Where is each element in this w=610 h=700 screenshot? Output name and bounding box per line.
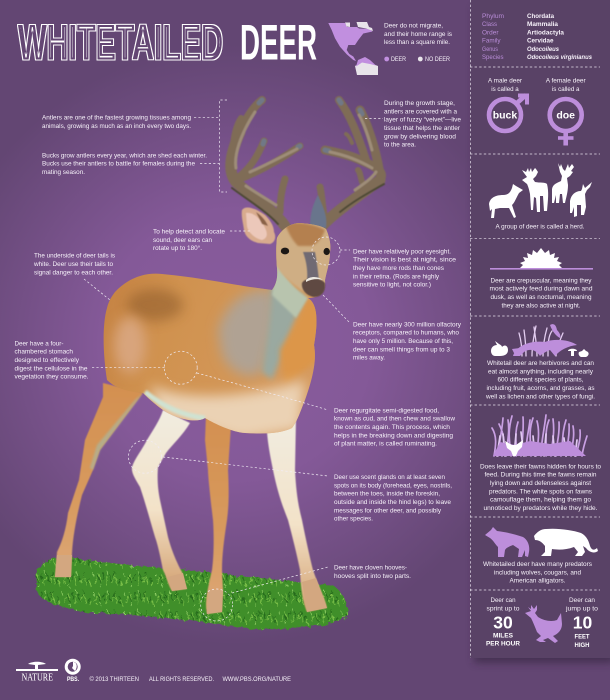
fawn text: unnoticed by predators while they hide. bbox=[484, 505, 598, 512]
eyes bbox=[281, 248, 289, 254]
jump caption: Deer can bbox=[569, 597, 595, 604]
map: greenland and arctic bbox=[345, 22, 373, 31]
buck caption bbox=[488, 78, 523, 93]
far leg shade bbox=[90, 393, 143, 470]
jump caption: jump up to bbox=[565, 605, 598, 612]
fruit bbox=[491, 341, 508, 356]
stat: jump height bbox=[565, 597, 598, 649]
callout: tail: The underside of deer tails is bbox=[34, 252, 116, 260]
callout: antler shedding: Bucks use their antlers to battle for females during the bbox=[42, 161, 195, 168]
activity text: dusk, as well as nocturnal, meaning bbox=[490, 294, 592, 301]
sprint caption: sprint up to bbox=[486, 605, 520, 612]
sprint unit bbox=[486, 632, 520, 648]
haunch highlight bbox=[114, 317, 146, 373]
callout: smell: have only 5 million. Because of this, bbox=[353, 338, 453, 345]
activity text: Deer are crepuscular, meaning they bbox=[490, 277, 592, 284]
diet text: 600 different species of plants, bbox=[498, 377, 584, 384]
callout: eyesight: in their retina. (Rods are highly bbox=[353, 273, 440, 280]
buck caption: is called a bbox=[491, 86, 519, 93]
sprint number: 30 bbox=[493, 612, 513, 632]
callout: hooves: Deer have cloven hooves- bbox=[334, 565, 407, 572]
taxonomy labels: Genus bbox=[482, 46, 499, 53]
callout: stomach: vegetation they consume. bbox=[14, 374, 89, 381]
callout: scent glands bbox=[334, 474, 452, 523]
muzzle bbox=[302, 278, 325, 297]
near hind leg bbox=[132, 410, 190, 591]
ear dark fold bbox=[256, 212, 268, 226]
taxonomy values bbox=[527, 13, 592, 61]
far ear bbox=[310, 195, 326, 228]
diet text bbox=[485, 360, 595, 400]
fawn silhouette bbox=[489, 184, 523, 218]
nose stripe bbox=[303, 252, 319, 280]
far hind leg bbox=[55, 383, 143, 577]
jump caption bbox=[565, 597, 598, 612]
pbs wordmark: PBS. bbox=[67, 677, 79, 683]
callout: ruminating: the contents again. This process, which bbox=[334, 424, 450, 431]
icon: male symbol bbox=[489, 95, 527, 131]
icon: deer herd bbox=[489, 163, 592, 218]
pbs roundel bbox=[66, 660, 79, 673]
antler tips bbox=[259, 100, 362, 151]
mushrooms bbox=[568, 349, 589, 357]
fawn text: feed. During this time the fawns remain bbox=[484, 472, 597, 479]
callout: antler growth: Antlers are one of the fastest growing tissues among bbox=[42, 114, 191, 122]
callout: ruminating: of plant matter, is called ruminating. bbox=[334, 441, 437, 448]
diet text: eat almost anything, including nearly bbox=[488, 368, 594, 375]
diet text: well as lichen and other types of fungi. bbox=[485, 393, 595, 400]
callout: tail: signal danger to each other. bbox=[34, 269, 113, 276]
ear outer bbox=[242, 207, 275, 244]
callout: antler growth bbox=[42, 114, 191, 130]
rump shading bbox=[127, 289, 183, 321]
front center leg bbox=[205, 415, 231, 614]
left antler bbox=[231, 100, 300, 226]
callout: eyesight: Deer have relatively poor eyesight. bbox=[353, 248, 451, 255]
head coat bbox=[276, 223, 330, 291]
herd caption: A group of deer is called a herd. bbox=[496, 223, 585, 230]
icon: leaping deer bbox=[525, 605, 562, 643]
migration note: Deer do not migrate, bbox=[384, 22, 443, 30]
taxonomy labels: Class bbox=[482, 21, 498, 28]
fawn text: Does leave their fawns hidden for hours to bbox=[480, 463, 601, 470]
taxonomy values: Artiodactyla bbox=[527, 29, 564, 36]
callout: smell: deer can smell things from up to 3 bbox=[353, 346, 450, 353]
right panel background bbox=[470, 0, 610, 658]
map: northern south america bbox=[356, 57, 376, 66]
taxonomy values: Odocoileus bbox=[527, 46, 559, 53]
chest orange bbox=[280, 298, 320, 385]
buck label: buck bbox=[493, 110, 517, 122]
migration note bbox=[384, 22, 453, 46]
antler highlights bbox=[236, 112, 376, 205]
callout: ruminating bbox=[334, 407, 455, 448]
callout: ears: rotate up to 180°. bbox=[153, 244, 202, 252]
muzzle highlight bbox=[306, 277, 323, 282]
callout: smell: receptors, compared to humans, who bbox=[353, 330, 459, 337]
footer logos bbox=[16, 660, 79, 684]
diet text: including fruit, acorns, and grasses, as bbox=[486, 385, 595, 392]
belly pale bbox=[150, 380, 305, 440]
callout: smell: Deer have nearly 300 million olfactory bbox=[353, 321, 462, 328]
neck pale underside bbox=[272, 262, 308, 318]
callout: ruminating: Deer regurgitate semi-digested food, bbox=[334, 407, 439, 414]
map legend: NO DEER bbox=[425, 56, 450, 63]
callout: hooves: hooves split into two parts. bbox=[334, 573, 411, 580]
jump unit bbox=[574, 634, 590, 649]
neck grey patch bbox=[262, 285, 305, 380]
callout: tail: white. Deer use their tails to bbox=[33, 261, 113, 268]
callout: smell bbox=[353, 321, 462, 362]
doe caption: A female deer bbox=[546, 78, 587, 84]
callout: scent glands: between the toes, inside the foreskin, bbox=[334, 491, 440, 498]
shoulder grey patch bbox=[218, 290, 276, 376]
footer credits: © 2013 THIRTEEN bbox=[90, 675, 139, 683]
sprint caption: Deer can bbox=[490, 597, 516, 604]
callout: scent glands: outside and inside the hind legs) to leave bbox=[334, 499, 451, 506]
acacia tree bbox=[16, 662, 58, 671]
migration note: less than a square mile. bbox=[384, 39, 450, 46]
ear inner bbox=[246, 213, 267, 240]
right panel shadow bbox=[474, 6, 610, 663]
title bbox=[18, 14, 317, 70]
near ear bbox=[242, 207, 275, 244]
callout: scent glands: messages for other deer, and possibly bbox=[334, 507, 442, 514]
predators text bbox=[483, 561, 593, 585]
jump number: 10 bbox=[573, 612, 592, 632]
title outlined word: WHITETAILED bbox=[18, 14, 223, 70]
map legend: DEER bbox=[391, 56, 406, 63]
tall grass bbox=[492, 415, 587, 456]
footer credits: WWW.PBS.ORG/NATURE bbox=[222, 676, 292, 683]
activity text: most actively feed during dawn and bbox=[490, 286, 593, 293]
doe caption bbox=[546, 78, 587, 93]
activity text bbox=[490, 277, 593, 309]
title solid word: DEER bbox=[240, 14, 317, 70]
hooves bbox=[55, 555, 327, 614]
face details bbox=[281, 248, 330, 297]
map: south america bbox=[355, 62, 378, 75]
standing buck silhouette bbox=[552, 163, 574, 203]
callout: ruminating: known as cud, and then chew and swallow bbox=[334, 416, 455, 423]
fawn text: lying down and defenseless against bbox=[490, 480, 591, 487]
sprint unit: MILES bbox=[493, 632, 513, 639]
buck caption: A male deer bbox=[488, 78, 523, 84]
migration note: and their home range is bbox=[384, 31, 453, 38]
footer credits bbox=[90, 675, 292, 683]
taxonomy labels: Family bbox=[482, 38, 501, 44]
icon: cougar bbox=[534, 529, 598, 556]
belly edge bbox=[145, 392, 205, 418]
callout: velvet bbox=[384, 100, 461, 148]
callout: eyesight: Their vision is best at night, since bbox=[353, 257, 456, 264]
taxonomy labels: Phylum bbox=[482, 13, 504, 20]
taxonomy labels: Order bbox=[482, 29, 499, 36]
callout: antler growth: animals, growing as much as an inch every two days. bbox=[42, 123, 191, 130]
sprint unit: PER HOUR bbox=[486, 641, 520, 648]
callout: stomach: designed to effectively bbox=[14, 357, 80, 364]
fawn text bbox=[480, 463, 601, 512]
taxonomy values: Mammalia bbox=[527, 21, 558, 28]
callout: velvet: grow by delivering blood bbox=[384, 133, 456, 140]
callout: stomach bbox=[14, 340, 89, 381]
icon: female symbol bbox=[550, 99, 582, 146]
jump unit: FEET bbox=[574, 634, 590, 640]
icon: rising sun bbox=[490, 248, 593, 270]
horizon line bbox=[490, 268, 593, 270]
pale grasses bbox=[519, 326, 563, 356]
right antler bbox=[320, 100, 381, 226]
callout: velvet: tissue that helps the antler bbox=[384, 125, 461, 132]
icon: wolf bbox=[485, 527, 529, 557]
grass patch bbox=[36, 558, 348, 629]
callout: smell: miles away. bbox=[353, 355, 385, 362]
annotation lines bbox=[84, 100, 383, 621]
callout: stomach: Deer have a four- bbox=[14, 340, 64, 347]
taxonomy values: Odocoileus virginianus bbox=[527, 54, 592, 61]
buck silhouette bbox=[522, 168, 548, 212]
jump unit: HIGH bbox=[574, 642, 590, 649]
callout: velvet: to the area. bbox=[384, 142, 416, 148]
buck section bbox=[488, 78, 527, 131]
callout: scent glands: spots on its body (forehead, eyes, nostrils, bbox=[334, 482, 452, 489]
grass base bbox=[493, 441, 586, 456]
callout: ears bbox=[153, 228, 225, 252]
callout: antler shedding: mating season. bbox=[42, 169, 85, 176]
callout: eyesight bbox=[353, 248, 456, 289]
fawn text: camouflage them, helping them go bbox=[490, 497, 591, 504]
forehead brown bbox=[285, 223, 325, 246]
taxonomy values: Cervidae bbox=[527, 38, 554, 44]
callout: scent glands: other species. bbox=[334, 516, 373, 523]
taxonomy labels: Species bbox=[482, 54, 504, 61]
callout: ears: To help detect and locate bbox=[153, 228, 225, 235]
map: north america bbox=[328, 23, 372, 61]
footer credits: ALL RIGHTS RESERVED. bbox=[149, 676, 214, 683]
callout: hooves bbox=[334, 565, 411, 580]
base coat bbox=[104, 223, 330, 434]
sun disc and rays bbox=[520, 248, 562, 268]
sprint caption bbox=[486, 597, 520, 612]
panel dividers bbox=[470, 0, 600, 658]
pbs head bbox=[72, 662, 77, 671]
callout: ruminating: helps in the breaking down and digesting bbox=[334, 432, 453, 439]
callout: ears: sound, deer ears can bbox=[153, 237, 212, 244]
taxonomy values: Chordata bbox=[527, 13, 554, 20]
doe silhouette bbox=[570, 182, 592, 217]
doe section bbox=[546, 78, 587, 146]
callout: eyesight: sensitive to light, not color.) bbox=[353, 282, 431, 289]
callout: stomach: digest the cellulose in the bbox=[14, 365, 88, 372]
icon: food plants bbox=[491, 324, 589, 357]
doe caption: is called a bbox=[552, 86, 580, 93]
predators text: including wolves, cougars, and bbox=[494, 569, 581, 576]
activity text: they are also active at night. bbox=[502, 302, 581, 309]
nature wordmark: NATURE bbox=[22, 673, 53, 684]
deer photo illustration bbox=[36, 100, 384, 629]
front right leg bbox=[267, 418, 327, 612]
leaf mass bbox=[513, 324, 577, 356]
antler shadows bbox=[232, 184, 384, 224]
stat: sprint speed bbox=[486, 597, 520, 648]
map legend bbox=[384, 56, 450, 63]
antlers bbox=[231, 100, 384, 226]
fawn text: predators. The white spots on fawns bbox=[489, 488, 593, 495]
callout: antler shedding bbox=[42, 152, 207, 176]
predators text: Whitetailed deer have many predators bbox=[483, 561, 593, 568]
small ground leaves bbox=[512, 348, 520, 353]
callout: scent glands: Deer use scent glands on at least seven bbox=[334, 474, 445, 481]
predators text: American alligators. bbox=[510, 578, 566, 585]
callout: velvet: layer of fuzzy “velvet”—live bbox=[384, 117, 461, 124]
range map bbox=[328, 22, 378, 75]
callout: eyesight: they have more rods than cones bbox=[353, 265, 445, 272]
torso, neck and head bbox=[104, 223, 330, 434]
fawn head bbox=[505, 440, 523, 456]
doe label: doe bbox=[556, 110, 575, 122]
callout: antler shedding: Bucks grow antlers every year, which are shed each winter. bbox=[42, 152, 207, 159]
callout: stomach: chambered stomach bbox=[14, 349, 73, 356]
icon: fawn hidden in grass bbox=[492, 415, 587, 456]
diet text: Whitetail deer are herbivores and can bbox=[487, 360, 594, 367]
callout: tail bbox=[33, 252, 116, 276]
callout: velvet: antlers are covered with a bbox=[384, 108, 457, 115]
taxonomy labels bbox=[482, 13, 504, 61]
taxonomy table bbox=[482, 13, 592, 61]
callout: velvet: During the growth stage, bbox=[384, 100, 455, 107]
